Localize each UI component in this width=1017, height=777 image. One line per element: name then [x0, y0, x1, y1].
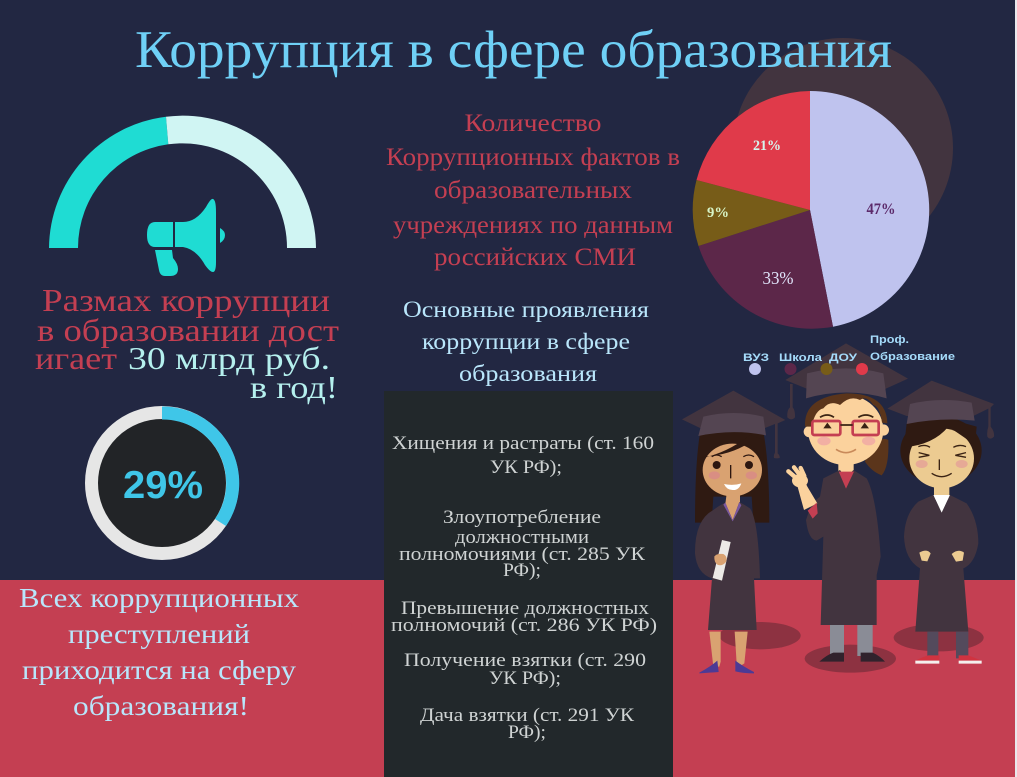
heading: number of corruption facts: учреждениях по данным	[393, 212, 673, 239]
panel: list of offences: должностными	[455, 527, 589, 548]
heading: number of corruption facts: российских СМИ	[434, 244, 636, 271]
text: scale of corruption	[35, 282, 339, 405]
panel: list of offences: полномочий (ст. 286 УК РФ)	[391, 615, 657, 636]
legend: Образование	[870, 351, 955, 363]
legend: ВУЗ	[743, 352, 769, 364]
decorative circle behind pie	[733, 38, 953, 258]
pie chart: 33%	[762, 268, 794, 288]
legend	[743, 334, 955, 375]
panel: list of offences	[384, 391, 673, 777]
legend: Школа	[779, 352, 823, 364]
panel: list of offences: Хищения и растраты (ст. 160	[392, 433, 654, 454]
text: scale of corruption: 30 млрд руб.	[128, 340, 330, 376]
red floor band	[0, 580, 1017, 777]
pie chart	[693, 91, 929, 329]
panel: list of offences: УК РФ);	[489, 668, 561, 689]
shadows	[719, 622, 984, 673]
student: middle	[785, 343, 908, 662]
text: scale of corruption: в образовании дост	[37, 312, 339, 348]
panel: list of offences: Злоупотребление	[443, 507, 601, 528]
text: share of crimes: преступлений	[68, 619, 250, 649]
heading: number of corruption facts: образовательных	[434, 177, 633, 204]
panel: list of offences: полномочиями (ст. 285 УК	[399, 544, 645, 565]
heading: number of corruption facts	[386, 110, 680, 271]
legend: Проф.	[870, 334, 909, 346]
legend: ДОУ	[829, 352, 857, 364]
donut chart: 29%: 29%	[123, 464, 203, 507]
text: share of crimes	[19, 583, 300, 721]
pie chart: 47%	[866, 201, 896, 218]
text: share of crimes: Всех коррупционных	[19, 583, 300, 613]
heading: number of corruption facts: Количество	[464, 110, 602, 137]
title: Коррупция в сфере образования	[135, 21, 892, 79]
text: scale of corruption: в год!	[250, 369, 338, 405]
student: right	[887, 381, 994, 664]
heading: main manifestations	[403, 297, 649, 386]
panel: list of offences: Превышение должностных	[401, 598, 650, 619]
icon: megaphone	[147, 199, 225, 276]
gauge chart	[49, 116, 316, 248]
text: scale of corruption: игает	[35, 340, 117, 376]
student: left	[682, 391, 785, 673]
text: share of crimes: образования!	[73, 691, 249, 721]
group: graduates illustration	[682, 343, 994, 673]
heading: main manifestations: образования	[459, 361, 597, 386]
panel: list of offences: РФ);	[503, 560, 541, 581]
text: scale of corruption: Размах коррупции	[42, 282, 330, 318]
panel: list of offences: Дача взятки (ст. 291 УК	[420, 705, 634, 726]
text: share of crimes: приходится на сферу	[22, 655, 297, 685]
pie chart: 21%	[753, 138, 781, 154]
panel: list of offences: РФ);	[508, 722, 546, 743]
heading: number of corruption facts: Коррупционных фактов в	[386, 144, 680, 171]
panel: list of offences: Получение взятки (ст. 290	[404, 650, 646, 671]
pie chart: 9%	[707, 205, 729, 221]
donut chart: 29%	[92, 406, 239, 554]
heading: main manifestations: коррупции в сфере	[422, 329, 630, 354]
heading: main manifestations: Основные проявления	[403, 297, 649, 322]
panel: list of offences: УК РФ);	[490, 457, 562, 478]
